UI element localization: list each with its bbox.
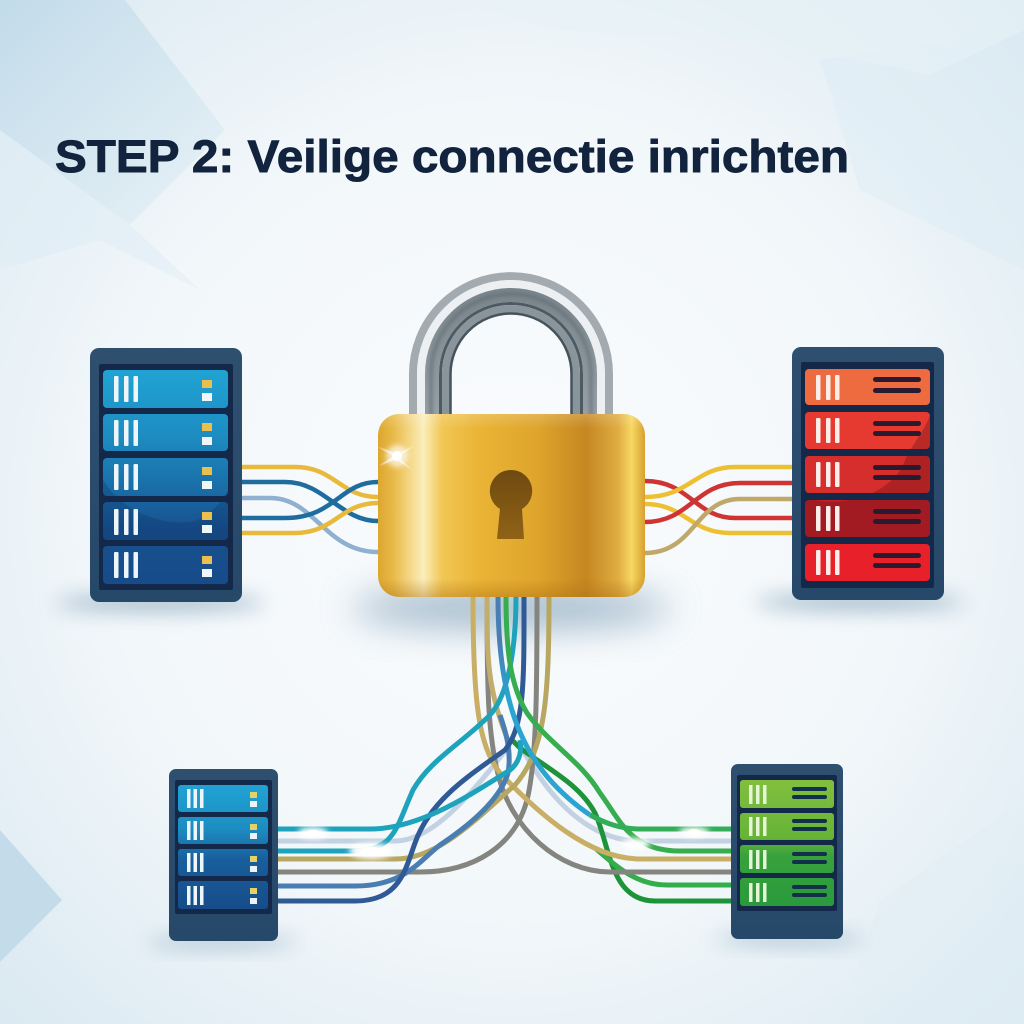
cable: green middle [506,596,731,851]
rows [805,369,930,405]
cable: green upper [590,815,731,829]
server: top right red [792,347,944,600]
vents [187,789,204,905]
cable: gray to left server [278,596,537,872]
cables: lock to bottom servers [278,596,731,901]
cable: green bottom [510,738,731,901]
title: STEP 2: Veilige connectie inrichten [55,131,849,182]
cable: tan to left server [278,596,549,859]
cable: cyan to lower left [278,596,516,851]
cable: tan inner [487,596,510,745]
sheen [805,415,930,540]
indicator lines [792,787,827,897]
cable: cyan to right [498,596,590,815]
padlock [378,276,645,597]
server: bottom right green [731,764,843,939]
shackle [413,276,609,416]
cables: left server to lock [242,467,378,552]
sparkles on cables [298,827,709,859]
status lights [250,792,257,904]
glint [378,445,414,470]
sheen [103,480,228,540]
cable: navy [278,596,524,901]
cable: gray to right server [487,596,731,872]
vents [816,375,840,575]
server: bottom left blue [169,769,278,941]
server: top left blue [90,348,242,602]
vents [114,376,138,578]
cable: blue centre [278,715,509,886]
cable: light to right server [520,745,731,841]
cables: right server to lock [645,467,792,553]
cable: cyan to upper left [278,740,521,829]
indicator lines [873,377,921,568]
status lights [202,380,212,577]
vents [749,785,766,902]
shadow: under servers and lock [55,586,965,947]
rows [740,780,834,906]
cable: green lower right [595,848,731,885]
keyhole [490,470,532,539]
rows [178,785,268,909]
rows [103,370,228,584]
cable: light to left server [278,745,510,841]
cable: tan to right server [473,596,731,859]
lock body [378,414,645,597]
